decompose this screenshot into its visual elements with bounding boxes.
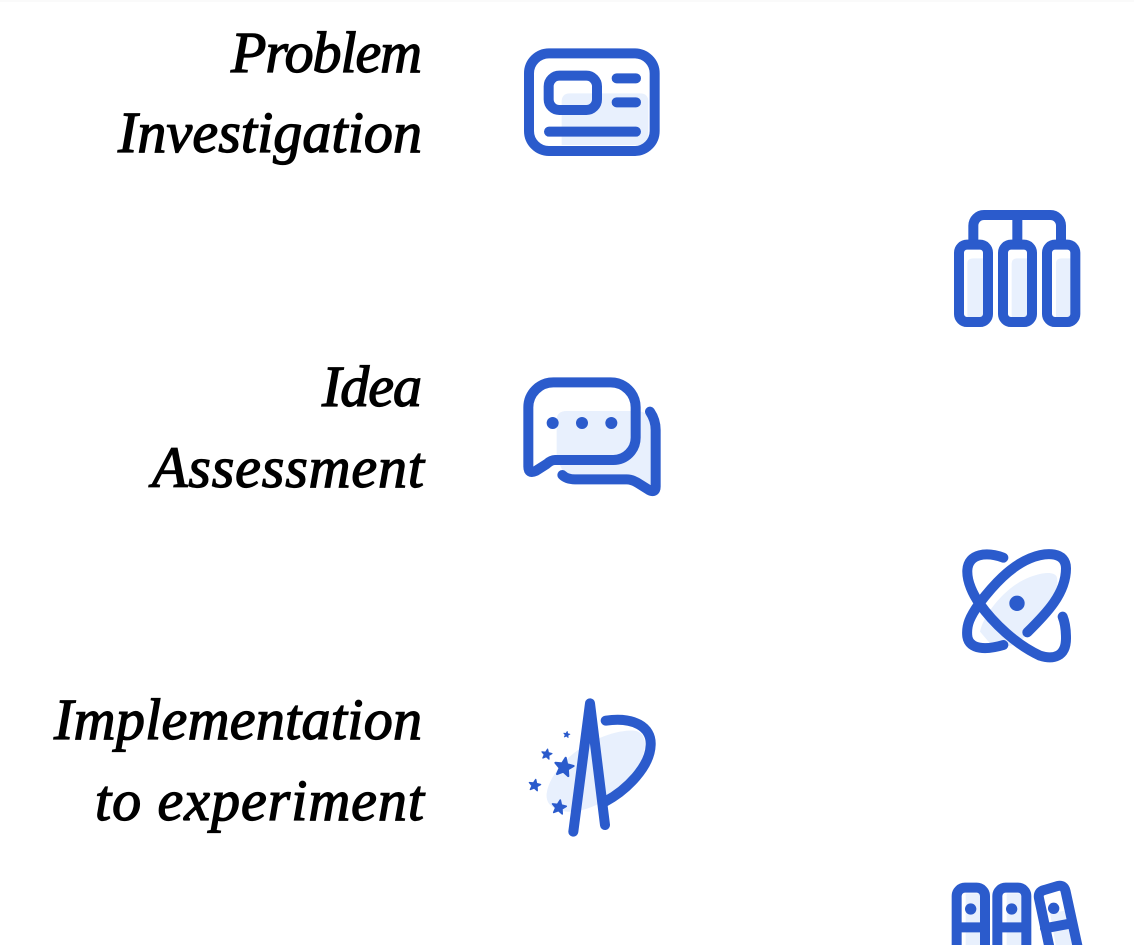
label: Idea Assessment	[148, 354, 426, 500]
icon: wand with stars	[528, 703, 651, 832]
icon: atom orbit	[967, 554, 1066, 657]
icon: three connected bars	[959, 215, 1075, 322]
label: Idea Assessment: Assessment	[148, 435, 426, 500]
label: Problem Investigation: Investigation	[117, 100, 422, 165]
icon: ID card	[529, 53, 655, 151]
icon: binders on a shelf	[957, 886, 1078, 945]
label: Implementation to experiment: Implementation	[53, 687, 422, 752]
label: Idea Assessment: Idea	[321, 354, 422, 419]
label: Implementation to experiment: to experiment	[95, 768, 426, 833]
icon: speech bubbles	[528, 382, 656, 491]
label: Implementation to experiment	[53, 687, 426, 833]
label: Problem Investigation: Problem	[230, 20, 422, 85]
label: Problem Investigation	[117, 20, 422, 165]
